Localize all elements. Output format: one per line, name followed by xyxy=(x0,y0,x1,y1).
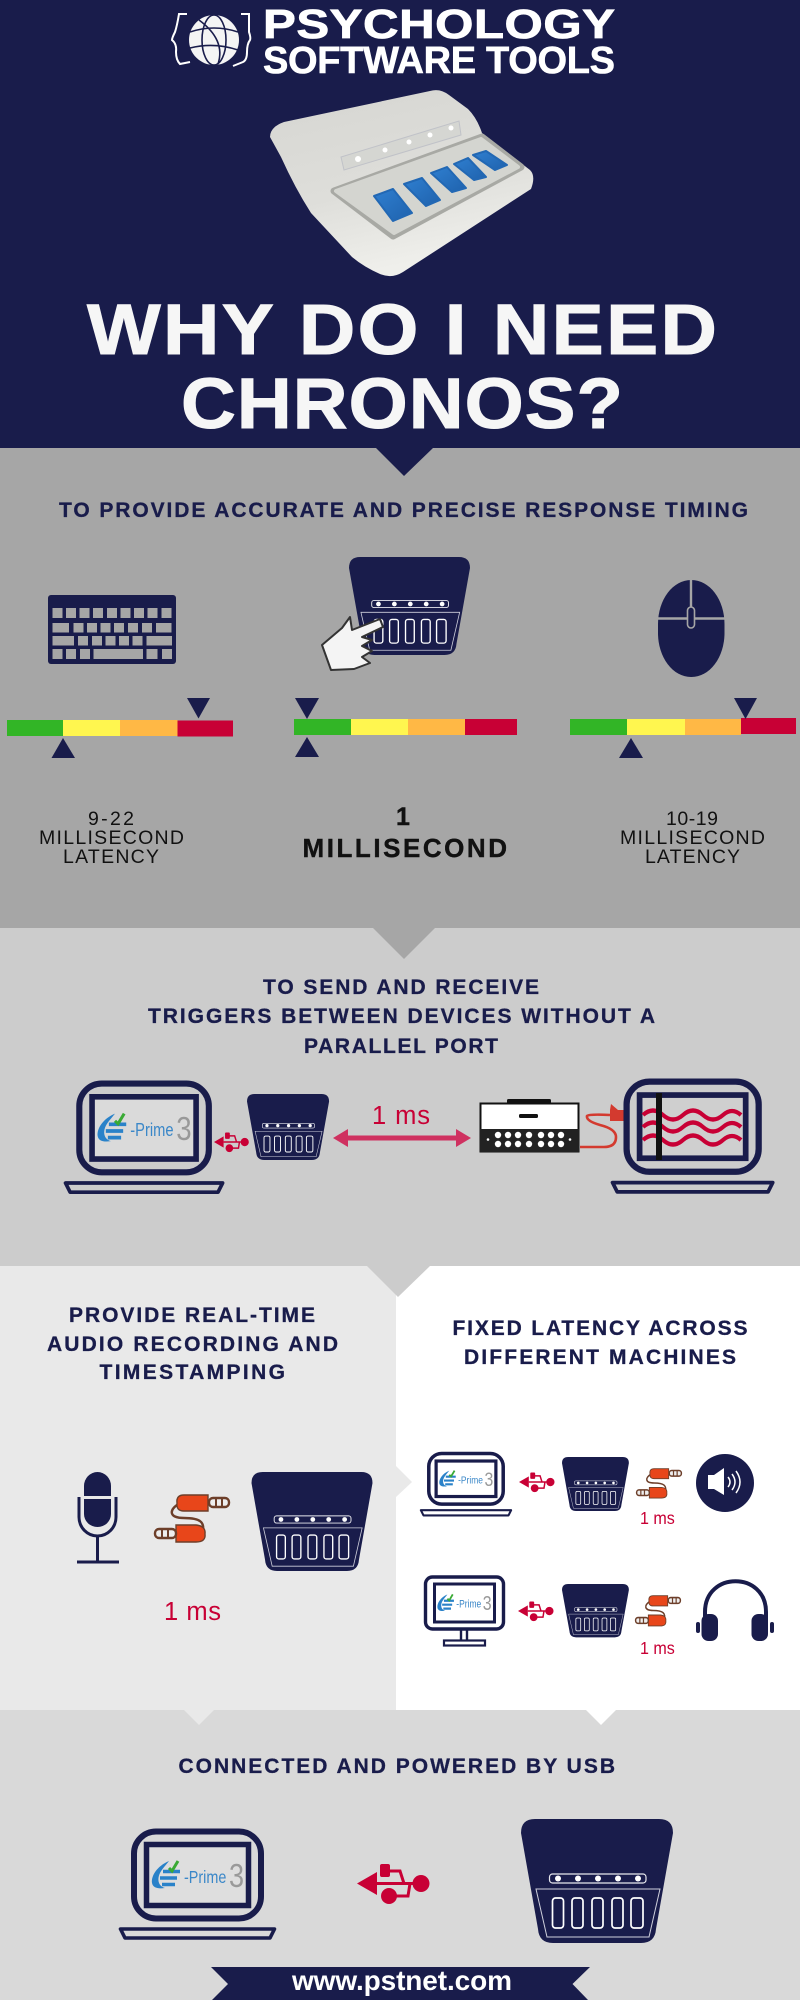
banner: website: www.pstnet.com xyxy=(291,1965,512,1996)
arrow: triggers pointer xyxy=(367,1266,430,1297)
icon: speaker xyxy=(696,1454,754,1512)
heading: triggers xyxy=(148,976,655,1058)
heading: fixed latency: DIFFERENT MACHINES xyxy=(464,1346,736,1369)
icon: monitor with E-Prime 3: -Prime xyxy=(456,1599,481,1611)
title: CHRONOS? xyxy=(181,363,623,443)
icon: usb xyxy=(518,1601,554,1621)
icon: laptop with E-Prime 3: -Prime xyxy=(458,1475,483,1487)
icon: trigger box xyxy=(480,1099,579,1152)
icon: red cable xyxy=(580,1104,624,1147)
panel: fixed latency xyxy=(367,1266,800,1710)
label: keyboard latency xyxy=(39,808,184,868)
label: 1 ms: 1 ms xyxy=(640,1638,675,1658)
label: mouse latency: LATENCY xyxy=(645,846,740,868)
arrow: audio pointer xyxy=(396,1466,412,1497)
panel: accurate response timing xyxy=(0,448,800,928)
icon: microphone xyxy=(77,1472,119,1562)
heading: fixed latency: FIXED LATENCY ACROSS xyxy=(452,1317,748,1340)
heading: audio xyxy=(47,1304,338,1384)
icon: Chronos xyxy=(521,1819,673,1943)
icon: usb xyxy=(214,1132,249,1152)
heading: triggers: TO SEND AND RECEIVE xyxy=(263,976,539,999)
icon: laptop with E-Prime 3: 3 xyxy=(484,1468,493,1490)
icon: Chronos xyxy=(247,1094,329,1160)
icon: Chronos with pointing hand xyxy=(322,557,470,670)
label: Chronos latency xyxy=(302,803,507,863)
heading: fixed latency xyxy=(452,1317,748,1369)
icon: keyboard xyxy=(48,595,176,664)
banner: website xyxy=(211,1965,590,2000)
arrow: section pointer xyxy=(373,928,435,959)
icon: usb xyxy=(357,1864,430,1904)
bar chart: keyboard latency xyxy=(7,698,233,758)
icon: audio cable xyxy=(155,1495,229,1542)
bar chart: Chronos latency xyxy=(294,698,517,757)
label: keyboard latency: MILLISECOND xyxy=(39,827,184,849)
label: 1 ms: 1 ms xyxy=(640,1508,675,1528)
panel: triggers xyxy=(0,928,800,1266)
icon: laptop with waveform xyxy=(613,1082,773,1192)
icon: laptop with E-Prime 3: 3 xyxy=(176,1110,192,1148)
icon: laptop with E-Prime 3: -Prime xyxy=(130,1120,174,1140)
title: WHY DO I NEED xyxy=(87,289,717,369)
logo text line 2: SOFTWARE TOOLS xyxy=(263,40,615,82)
icon: headphones xyxy=(696,1581,774,1641)
device photo: Chronos xyxy=(270,90,533,276)
icon: Chronos xyxy=(562,1457,629,1511)
icon: audio cable xyxy=(636,1596,680,1626)
icon: Chronos xyxy=(562,1584,629,1637)
panel: usb xyxy=(0,1710,800,2000)
icon: monitor with E-Prime 3: 3 xyxy=(483,1592,492,1615)
icon: audio cable xyxy=(637,1469,681,1498)
heading: triggers: TRIGGERS BETWEEN DEVICES WITHOUT A xyxy=(148,1005,655,1028)
icon: laptop with E-Prime 3: -Prime xyxy=(184,1868,226,1887)
label: mouse latency: MILLISECOND xyxy=(620,827,765,849)
label: Chronos latency: MILLISECOND xyxy=(302,833,507,863)
label: 1 ms: 1 ms xyxy=(372,1102,430,1130)
label: keyboard latency: LATENCY xyxy=(63,846,159,868)
logo: Psychology Software Tools xyxy=(172,1,615,82)
arrow: fixed latency pointer xyxy=(586,1710,616,1725)
arrow: header pointer xyxy=(376,448,433,476)
heading: usb: CONNECTED AND POWERED BY USB xyxy=(178,1755,615,1778)
icon: monitor with E-Prime 3 xyxy=(426,1577,504,1646)
heading: response timing: TO PROVIDE ACCURATE AND PRECISE RESPONSE TIMING xyxy=(59,499,748,522)
heading: audio: AUDIO RECORDING AND xyxy=(47,1333,338,1356)
label: mouse latency: 10-19 xyxy=(666,808,718,830)
icon: hand xyxy=(322,617,383,670)
label: keyboard latency: 9-22 xyxy=(88,808,134,830)
label: 1 ms: 1 ms xyxy=(164,1598,221,1626)
panel: header xyxy=(0,0,800,448)
arrow: audio pointer xyxy=(184,1710,214,1725)
arrow: double headed xyxy=(333,1129,471,1147)
title xyxy=(87,289,717,443)
icon: laptop with E-Prime 3: 3 xyxy=(229,1859,244,1895)
label: mouse latency xyxy=(620,808,765,868)
icon: usb xyxy=(519,1472,555,1492)
bar chart: mouse latency xyxy=(570,698,796,758)
icon: globe head xyxy=(172,14,250,66)
icon: Chronos xyxy=(252,1472,372,1571)
panel: audio recording xyxy=(0,1266,396,1710)
heading: triggers: PARALLEL PORT xyxy=(304,1035,498,1058)
icon: laptop with E-Prime 3 xyxy=(421,1453,511,1515)
icon: laptop with E-Prime 3 xyxy=(120,1832,274,1938)
label: Chronos latency: 1 xyxy=(396,803,410,831)
heading: audio: PROVIDE REAL-TIME xyxy=(69,1304,315,1327)
heading: audio: TIMESTAMPING xyxy=(100,1361,285,1384)
icon: mouse xyxy=(658,580,724,677)
icon: laptop with E-Prime 3 xyxy=(66,1084,223,1192)
logo text line 1: PSYCHOLOGY xyxy=(263,1,615,47)
